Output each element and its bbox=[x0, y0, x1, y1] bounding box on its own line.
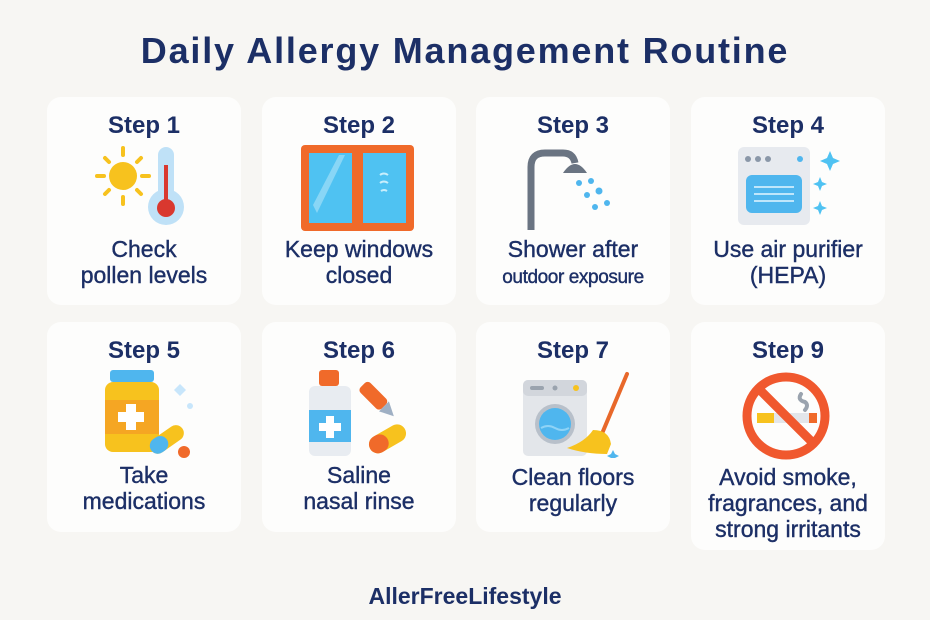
text: medications bbox=[83, 488, 205, 514]
text: Saline bbox=[327, 462, 391, 488]
panel: step 2: Step 2 bbox=[323, 112, 395, 139]
text: closed bbox=[326, 262, 392, 288]
text bbox=[512, 464, 634, 516]
text: nasal rinse bbox=[303, 488, 415, 514]
text: fragrances, and bbox=[708, 490, 868, 516]
text bbox=[713, 236, 863, 288]
text bbox=[502, 236, 644, 288]
icon: sun and thermometer bbox=[95, 146, 184, 225]
text bbox=[285, 236, 433, 288]
icon: window bbox=[301, 145, 414, 231]
text: regularly bbox=[529, 490, 617, 516]
text bbox=[708, 464, 868, 542]
panel: step 1 bbox=[47, 97, 241, 305]
panel: step 5: Step 5 bbox=[108, 337, 180, 364]
panel: step 4 bbox=[691, 97, 885, 305]
text: Keep windows bbox=[285, 236, 433, 262]
text bbox=[303, 462, 415, 514]
text: (HEPA) bbox=[750, 262, 826, 288]
panel: step 5 bbox=[47, 322, 241, 532]
icon: washer and broom bbox=[523, 372, 630, 458]
title: Daily Allergy Management Routine bbox=[141, 30, 789, 71]
panel: step 6 bbox=[262, 322, 456, 532]
icon: medication bbox=[105, 370, 193, 458]
icon: no smoking bbox=[742, 372, 830, 460]
panel: step 1: Step 1 bbox=[108, 112, 180, 139]
text: Clean floors bbox=[512, 464, 634, 490]
text bbox=[83, 462, 205, 514]
text: Take bbox=[120, 462, 168, 488]
panel: step 6: Step 6 bbox=[323, 337, 395, 364]
icon: shower bbox=[528, 150, 610, 230]
panel: step 2 bbox=[262, 97, 456, 305]
text: Check bbox=[111, 236, 177, 262]
panel: step 9: Step 9 bbox=[752, 337, 824, 364]
footer brand: AllerFreeLifestyle bbox=[368, 583, 562, 609]
panel: step 4: Step 4 bbox=[752, 112, 824, 139]
text: pollen levels bbox=[81, 262, 207, 288]
text: Shower after bbox=[508, 236, 638, 262]
text: strong irritants bbox=[715, 516, 861, 542]
text: Avoid smoke, bbox=[719, 464, 857, 490]
text bbox=[81, 236, 207, 288]
panel: step 3: Step 3 bbox=[537, 112, 609, 139]
text: Use air purifier bbox=[713, 236, 863, 262]
panel: step 7: Step 7 bbox=[537, 337, 609, 364]
panel: step 9 bbox=[691, 322, 885, 550]
panel: step 3 bbox=[476, 97, 670, 305]
icon: saline bottle bbox=[309, 370, 406, 456]
text: outdoor exposure bbox=[502, 267, 644, 288]
panel: step 7 bbox=[476, 322, 670, 532]
icon: air purifier bbox=[738, 147, 840, 225]
